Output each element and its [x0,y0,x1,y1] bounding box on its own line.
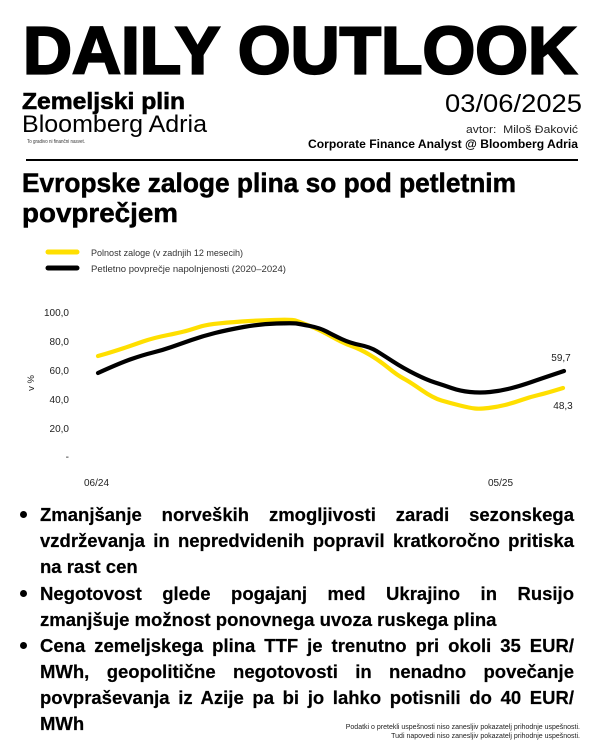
bullet 1: na rast cen [40,556,138,577]
date and author: 03/06/2025 [445,90,582,118]
yellow series: storage fullness [98,320,563,409]
y axis labels: - [66,452,69,463]
black series: five-year average [98,323,564,392]
end value labels: 48,3 [553,401,573,412]
line chart [26,308,573,489]
y axis labels: 40,0 [50,395,69,406]
x axis labels [84,478,513,489]
bullet 3: MWh [40,713,84,734]
y axis labels: 60,0 [50,366,69,377]
y axis labels [44,308,69,463]
x axis labels: 06/24 [84,478,109,489]
y axis title: v % [26,375,37,391]
end value labels [551,353,573,412]
date and author [308,90,582,151]
bullet 3 [20,635,574,734]
y axis labels: 80,0 [50,337,69,348]
bullet 3: MWh, geopolitične negotovosti in nenadno povečanje [40,661,574,682]
end value labels: 59,7 [551,353,571,364]
subtitle: topic and brand: To gradivo ni finančni nasvet. [27,139,85,145]
disclaimer: Tudi napovedi niso zanesljiv pokazatelj prihodnje uspešnosti. [391,733,580,740]
chart heading: povprečjem [22,198,178,228]
legend: Petletno povprečje napolnjenosti (2020–2024) [91,264,286,275]
y axis labels: 100,0 [44,308,69,319]
x axis labels: 05/25 [488,478,513,489]
title: DAILY OUTLOOK [23,14,577,88]
date and author: Corporate Finance Analyst @ Bloomberg Adria [308,137,578,151]
disclaimer: Podatki o pretekli uspešnosti niso zanesljiv pokazatelj prihodnje uspešnosti. [346,724,580,731]
chart heading [22,168,516,228]
subtitle: topic and brand: Bloomberg Adria [22,111,208,138]
bullet 1: vzdrževanja in nepredvidenih popravil kratkoročno pritiska [40,530,574,551]
bullet 3: Cena zemeljskega plina TTF je trenutno pri okoli 35 EUR/ [40,635,574,656]
bullet 2 [20,583,574,630]
chart heading: Evropske zaloge plina so pod petletnim [22,168,516,198]
bullet list [20,504,574,734]
subtitle: topic and brand [22,88,208,145]
legend [48,248,286,275]
y axis labels: 20,0 [50,424,69,435]
bullet 2: Negotovost glede pogajanj med Ukrajino in Rusijo [40,583,574,604]
date and author: avtor: Miloš Đaković [466,124,579,136]
bullet 3: povpraševanja iz Azije pa bi jo lahko potisnili do 40 EUR/ [40,687,574,708]
disclaimer [346,724,580,740]
bullet 1: Zmanjšanje norveških zmogljivosti zaradi sezonskega [40,504,574,525]
bullet 2: zmanjšuje možnost ponovnega uvoza ruskega plina [40,609,496,630]
bullet 1 [20,504,574,577]
subtitle: topic and brand: Zemeljski plin [22,88,185,114]
legend: Polnost zaloge (v zadnjih 12 mesecih) [91,248,243,259]
